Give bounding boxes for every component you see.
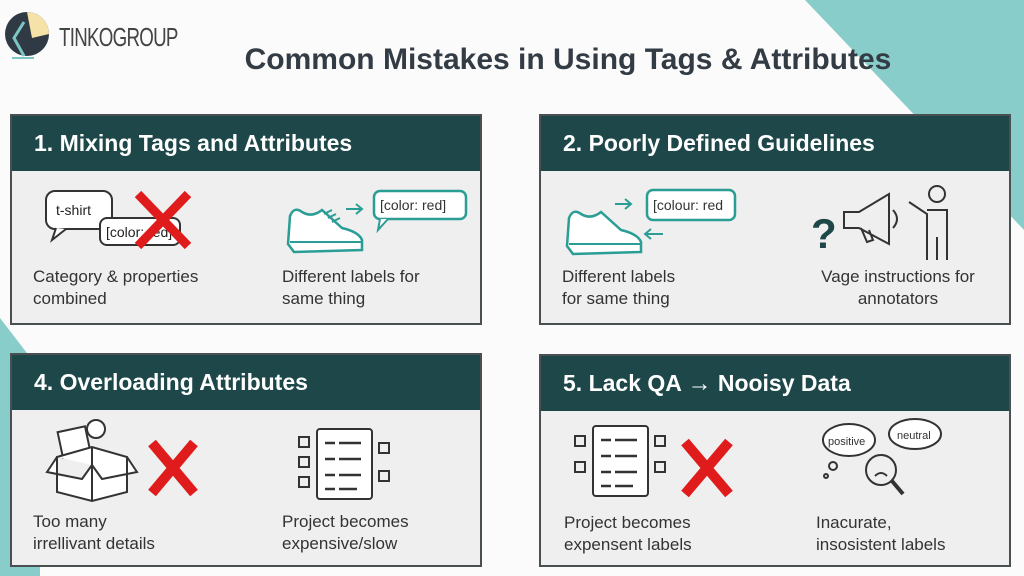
caption 4a: irrellivant details <box>33 534 155 553</box>
caption 5b: Inacurate, <box>816 513 892 532</box>
caption 2b <box>821 267 975 308</box>
icon: sentiment bubbles <box>822 418 942 496</box>
icon: speech bubbles with X: [color: red] <box>106 224 172 240</box>
caption 2a <box>562 267 675 308</box>
caption 1b <box>282 267 420 308</box>
panel: 5 lack QA <box>539 354 1011 567</box>
icon: speech bubbles with X <box>45 190 192 250</box>
icon: shoe with label: [color: red] <box>380 197 446 213</box>
caption 2b: Vage instructions for <box>821 267 975 286</box>
caption 2b: annotators <box>858 289 938 308</box>
caption 4a <box>33 512 155 553</box>
icon: shoe with arrows: [colour: red <box>653 197 723 213</box>
panel: 1 mixing: 1. Mixing Tags and Attributes <box>34 130 352 156</box>
icon: shoe with label <box>286 190 468 254</box>
caption 2a: Different labels <box>562 267 675 286</box>
icon: question megaphone person: ? <box>811 210 837 257</box>
logo: TINKOGROUP <box>59 22 178 52</box>
caption 5a: Project becomes <box>564 513 691 532</box>
caption 4b: expensive/slow <box>282 534 397 553</box>
caption 1b: Different labels for <box>282 267 420 286</box>
caption 4b <box>282 512 409 553</box>
icon: question megaphone person <box>811 185 948 260</box>
title: Common Mistakes in Using Tags & Attributes <box>245 43 891 76</box>
icon: box with X <box>45 419 198 502</box>
panel: 5 lack QA: 5. Lack QA → Nooisy Data <box>563 370 851 397</box>
caption 1a: Category & properties <box>33 267 198 286</box>
caption 4b: Project becomes <box>282 512 409 531</box>
caption 4a: Too many <box>33 512 107 531</box>
icon: speech bubbles with X: t-shirt <box>56 202 91 218</box>
icon: checklist <box>298 428 390 500</box>
icon: sentiment bubbles: neutral <box>897 430 931 442</box>
caption 5b <box>816 513 945 554</box>
icon: checklist with X <box>574 425 733 498</box>
panel: 2 guidelines <box>539 114 1011 325</box>
caption 1a <box>33 267 198 308</box>
caption 1a: combined <box>33 289 107 308</box>
caption 2a: for same thing <box>562 289 670 308</box>
caption 5a <box>564 513 692 554</box>
icon: shoe with arrows <box>566 188 736 256</box>
caption 5a: expensent labels <box>564 535 692 554</box>
panel: 4 overloading <box>10 353 482 567</box>
caption 1b: same thing <box>282 289 365 308</box>
panel: 2 guidelines: 2. Poorly Defined Guidelines <box>563 130 875 156</box>
caption 5b: insosistent labels <box>816 535 945 554</box>
panel: 1 mixing <box>10 114 482 325</box>
icon: sentiment bubbles: positive <box>828 436 865 448</box>
panel: 4 overloading: 4. Overloading Attributes <box>34 369 308 395</box>
logo <box>5 12 178 59</box>
